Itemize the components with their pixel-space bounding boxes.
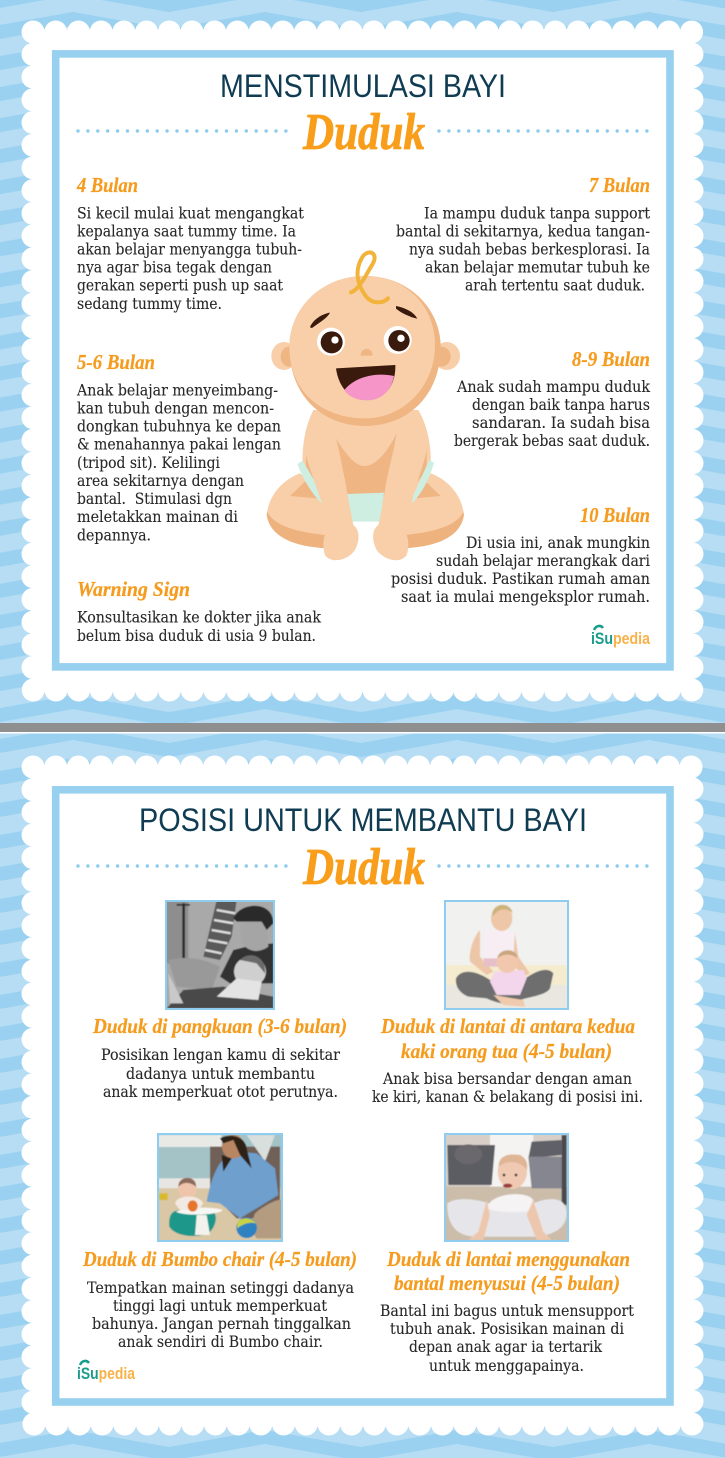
block: Warning Sign: belum bisa duduk di usia 9 bulan. [77, 626, 316, 645]
belly shade [335, 433, 397, 497]
caption: Duduk di lantai menggunakan bantal menyusui: tubuh anak. Posisikan mainan di [390, 1319, 624, 1338]
torso [302, 410, 431, 520]
hip shade [290, 478, 441, 498]
brows [310, 306, 417, 328]
block: 5-6 Bulan: 5-6 Bulan [77, 350, 155, 374]
photo: baby on nursing pillow [444, 1133, 569, 1243]
block: 5-6 Bulan: kan tubuh dengan mencon- [77, 398, 274, 418]
photo: mother sitting with baby between legs [444, 900, 569, 1010]
hair curl [351, 252, 388, 302]
heading: Duduk: Duduk [302, 839, 425, 896]
block: 7 Bulan [396, 173, 651, 295]
diaper sides [297, 460, 434, 504]
block: 5-6 Bulan: Anak belajar menyeimbang- [76, 380, 278, 400]
block: 4 Bulan: akan belajar menyangga tubuh- [77, 240, 302, 259]
block: 7 Bulan: arah tertentu saat duduk. [465, 276, 645, 295]
dotted rule right [439, 864, 648, 868]
caption: Duduk di Bumbo chair: anak sendiri di Bumbo chair. [118, 1332, 323, 1351]
dotted rule left [78, 864, 287, 868]
dotted rule right [439, 129, 648, 133]
panel: positions to help the baby sit [33, 767, 692, 1424]
blue frame [56, 54, 670, 667]
caption: Duduk di lantai menggunakan bantal menyusui: depan anak agar ia tertarik [409, 1337, 602, 1356]
block: 5-6 Bulan: (tripod sit). Kelilingi [77, 453, 220, 472]
caption: Duduk di lantai di antara kedua kaki: kaki orang tua (4-5 bulan) [401, 1039, 612, 1063]
mouth [336, 365, 395, 400]
block: 5-6 Bulan: & menahannya pakai lengan [77, 435, 281, 454]
block: 8-9 Bulan [454, 347, 650, 450]
block: 10 Bulan [391, 503, 650, 606]
caption: Duduk di pangkuan: Duduk di pangkuan (3-6 bulan) [92, 1014, 347, 1038]
logo: iSupedia: iSupedia [77, 1364, 135, 1383]
block: 5-6 Bulan: bantal. Stimulasi dgn [77, 489, 232, 508]
title: MENSTIMULASI BAYI [220, 68, 506, 104]
block: 7 Bulan: bantal di sekitarnya, kedua tangan- [396, 222, 650, 240]
block: 8-9 Bulan: bergerak bebas saat duduk. [454, 431, 650, 450]
left arm [305, 414, 359, 560]
caption: Duduk di lantai di antara kedua kaki: ke kiri, kanan & belakang di posisi ini. [372, 1087, 643, 1106]
caption: Duduk di lantai menggunakan bantal menyusui: Bantal ini bagus untuk mensupport [380, 1301, 635, 1320]
block: 10 Bulan: sudah belajar merangkak dari [436, 551, 650, 570]
left leg [267, 473, 357, 548]
caption: Duduk di Bumbo chair: bahunya. Jangan pernah tinggalkan [92, 1314, 351, 1333]
block: 8-9 Bulan: 8-9 Bulan [572, 347, 650, 371]
caption: Duduk di lantai menggunakan bantal menyusui [380, 1247, 635, 1375]
block: 5-6 Bulan: area sekitarnya dengan [77, 471, 244, 490]
caption: Duduk di pangkuan: anak memperkuat otot perutnya. [103, 1082, 338, 1101]
caption: Duduk di Bumbo chair: tinggi lagi untuk memperkuat [113, 1296, 328, 1315]
caption: Duduk di pangkuan [92, 1014, 347, 1101]
caption: Duduk di lantai menggunakan bantal menyusui: Duduk di lantai menggunakan [386, 1247, 630, 1271]
head [289, 276, 441, 426]
right arm [373, 414, 427, 560]
caption: Duduk di pangkuan: dadanya untuk membantu [126, 1064, 315, 1083]
caption: Duduk di lantai di antara kedua kaki: Anak bisa bersandar dengan aman [382, 1069, 632, 1088]
divider band between panels [0, 723, 725, 734]
block: 10 Bulan: Di usia ini, anak mungkin [466, 533, 650, 552]
block: 7 Bulan: Ia mampu duduk tanpa support [424, 204, 651, 222]
block: 10 Bulan: saat ia mulai mengeksplor rumah. [401, 587, 650, 606]
ears [271, 342, 297, 370]
right leg [374, 473, 464, 548]
block: Warning Sign: Konsultasikan ke dokter jika anak [77, 608, 321, 627]
scalloped white card [33, 767, 692, 1424]
block: 4 Bulan: 4 Bulan [76, 173, 138, 197]
background: chevron pattern, bottom [0, 733, 725, 1458]
tongue [344, 375, 394, 400]
illustration: sitting baby [267, 252, 464, 560]
nose [361, 349, 373, 356]
photo: father with baby on lap [165, 900, 275, 1010]
blue frame [56, 790, 670, 1402]
block: 10 Bulan: 10 Bulan [580, 503, 650, 527]
caption: Duduk di Bumbo chair: Tempatkan mainan setinggi dadanya [87, 1278, 354, 1297]
title: POSISI UNTUK MEMBANTU BAYI [139, 802, 587, 838]
block: Warning Sign [77, 577, 321, 645]
caption: Duduk di pangkuan: Posisikan lengan kamu di sekitar [101, 1045, 340, 1064]
block: 10 Bulan: posisi duduk. Pastikan rumah aman [391, 569, 650, 588]
caption: Duduk di lantai menggunakan bantal menyusui: untuk menggapainya. [429, 1356, 584, 1375]
photo: baby in Bumbo chair with mother [157, 1133, 283, 1243]
block: 5-6 Bulan: meletakkan mainan di [77, 507, 238, 526]
block: 5-6 Bulan: depannya. [77, 526, 151, 544]
eyes [317, 328, 345, 356]
caption: Duduk di lantai menggunakan bantal menyusui: bantal menyusui (4-5 bulan) [394, 1271, 620, 1295]
caption: Duduk di lantai di antara kedua kaki: Duduk di lantai di antara kedua [380, 1014, 635, 1038]
block: 5-6 Bulan [76, 350, 281, 544]
side shade [306, 440, 427, 482]
block: 8-9 Bulan: sandaran. Ia sudah bisa [472, 413, 650, 432]
logo: iSupedia: iSupedia [591, 629, 650, 648]
background: chevron pattern, top [0, 0, 725, 723]
caption: Duduk di lantai di antara kedua kaki [372, 1014, 643, 1106]
block: 5-6 Bulan: dongkan tubuhnya ke depan [77, 417, 281, 436]
block: 4 Bulan [76, 173, 305, 313]
block: 7 Bulan: akan belajar memutar tubuh ke [425, 258, 650, 277]
caption: Duduk di Bumbo chair: Duduk di Bumbo chair (4-5 bulan) [82, 1247, 357, 1271]
block: Warning Sign: Warning Sign [77, 577, 190, 601]
caption: Duduk di Bumbo chair [82, 1247, 357, 1351]
block: 8-9 Bulan: dengan baik tanpa harus [472, 395, 650, 414]
block: 4 Bulan: sedang tummy time. [77, 294, 222, 313]
block: 4 Bulan: kepalanya saat tummy time. Ia [77, 222, 296, 240]
block: 8-9 Bulan: Anak sudah mampu duduk [456, 377, 650, 396]
panel: stimulating the baby to sit [33, 32, 692, 690]
dotted rule left [78, 129, 287, 133]
block: 4 Bulan: nya agar bisa tegak dengan [77, 258, 272, 277]
block: 7 Bulan: 7 Bulan [589, 173, 650, 197]
scalloped white card [33, 32, 692, 690]
block: 4 Bulan: gerakan seperti push up saat [77, 276, 284, 295]
block: 7 Bulan: nya sudah bebas berkesplorasi. Ia [409, 240, 650, 259]
diaper front [347, 493, 384, 522]
heading: Duduk: Duduk [302, 104, 425, 161]
block: 4 Bulan: Si kecil mulai kuat mengangkat [77, 204, 305, 222]
